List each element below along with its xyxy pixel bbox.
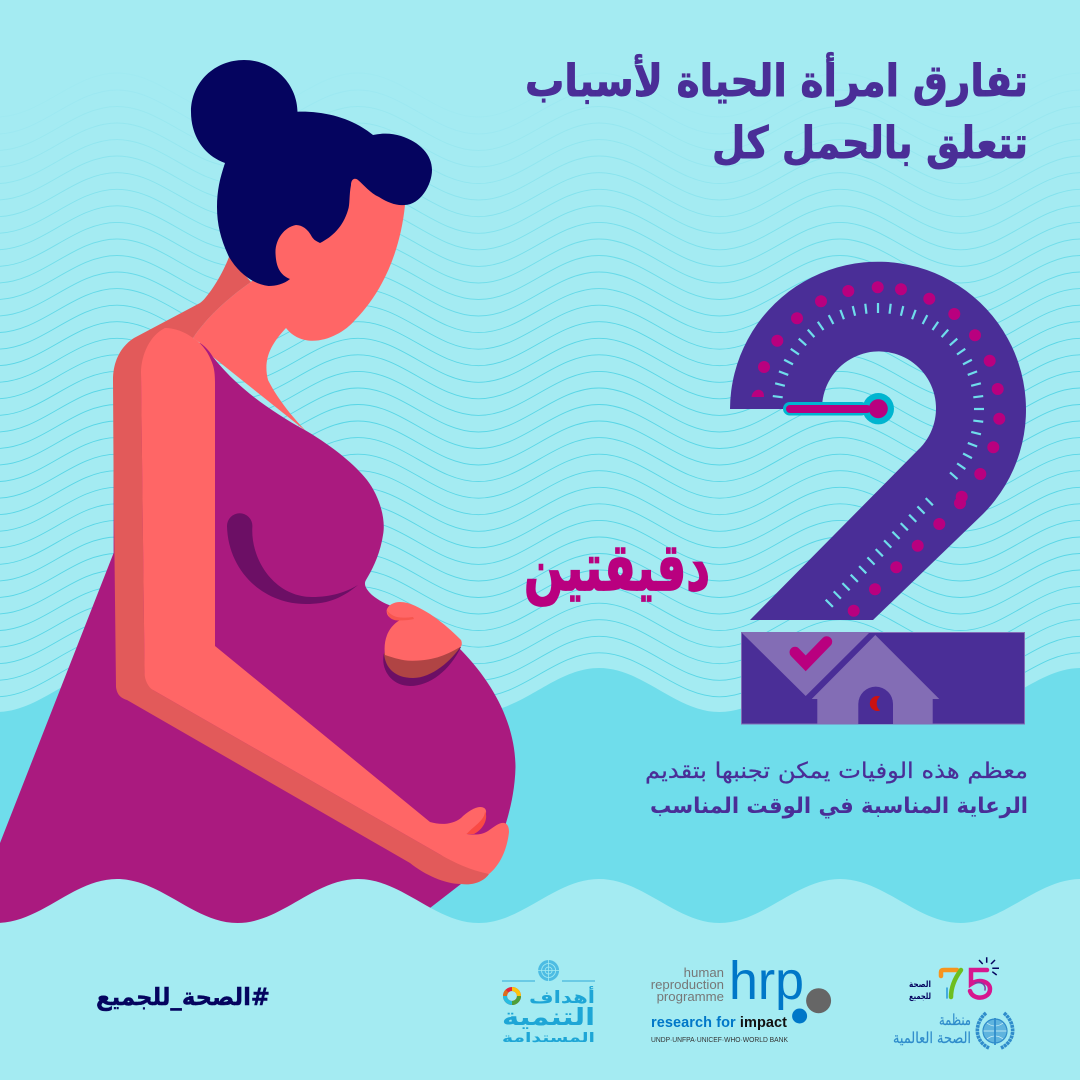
logo: sustainable development goals: المستدامة <box>502 1031 595 1046</box>
health for all caption <box>909 980 931 1002</box>
upper hand <box>385 602 462 661</box>
logo: hrp: human <box>684 965 724 980</box>
light bottom wave <box>0 879 1080 1080</box>
logo: sustainable development goals: التنمية <box>502 1003 595 1031</box>
dress <box>0 343 516 960</box>
bust shadow <box>227 513 358 604</box>
panel background <box>742 632 1024 724</box>
title: تتعلق بالحمل كل <box>712 118 1028 169</box>
near arm and lower hand <box>141 328 509 874</box>
health for all caption: للجميع <box>909 992 931 1002</box>
check mark <box>795 642 827 663</box>
upper hand palm shade <box>384 646 461 678</box>
WHO wordmark: الصحة العالمية <box>893 1029 971 1047</box>
logo: sustainable development goals: أهداف <box>529 986 595 1008</box>
title <box>525 52 1028 169</box>
supporting text: الرعاية المناسبة في الوقت المناسب <box>650 794 1028 819</box>
envelope flap <box>742 633 869 696</box>
pregnant woman illustration <box>0 60 516 960</box>
number 2 gauge <box>730 262 1026 620</box>
gauge needle <box>783 393 894 424</box>
logo: hrp: programme <box>657 989 724 1004</box>
teal water band <box>0 668 1080 1080</box>
face and neck <box>193 175 405 432</box>
SDG wheel <box>505 989 519 1003</box>
WHO emblem <box>977 1013 1013 1048</box>
logo: sustainable development goals <box>502 960 595 1046</box>
logo: hrp: research for impact <box>651 1015 787 1031</box>
heading: two minutes: دقيقتين <box>524 529 710 606</box>
logo: hrp: UNDP·UNFPA·UNICEF·WHO·WORLD BANK <box>651 1035 788 1044</box>
WHO wordmark: منظمة <box>939 1011 971 1029</box>
hair with buns <box>191 60 432 286</box>
home and envelope panel <box>742 632 1024 724</box>
upper thumb detail <box>387 610 414 620</box>
title: تفارق امرأة الحياة لأسباب <box>525 52 1028 107</box>
sun rays <box>979 957 999 975</box>
crescent <box>870 696 880 711</box>
back, neck shadow and far arm <box>113 257 489 884</box>
logo: hrp: hrp <box>729 951 804 1011</box>
logo: hrp <box>651 951 831 1044</box>
upper hand shadow on belly <box>383 647 461 686</box>
lower thumb detail <box>467 811 486 834</box>
gauge ticks <box>773 303 984 607</box>
WHO wordmark <box>893 1011 971 1047</box>
75 mark <box>941 970 990 998</box>
house <box>812 635 939 724</box>
logo: hrp: reproduction <box>651 977 724 992</box>
numeral 2 shape <box>730 262 1026 620</box>
hashtag: #الصحة_للجميع <box>96 983 270 1011</box>
gauge dots <box>752 281 1005 617</box>
supporting text <box>645 759 1028 819</box>
logo: WHO 75 <box>893 957 1013 1048</box>
supporting text: معظم هذه الوفيات يمكن تجنبها بتقديم <box>645 759 1028 784</box>
door <box>858 687 893 724</box>
health for all caption: الصحة <box>909 980 931 990</box>
UN emblem <box>538 960 559 981</box>
